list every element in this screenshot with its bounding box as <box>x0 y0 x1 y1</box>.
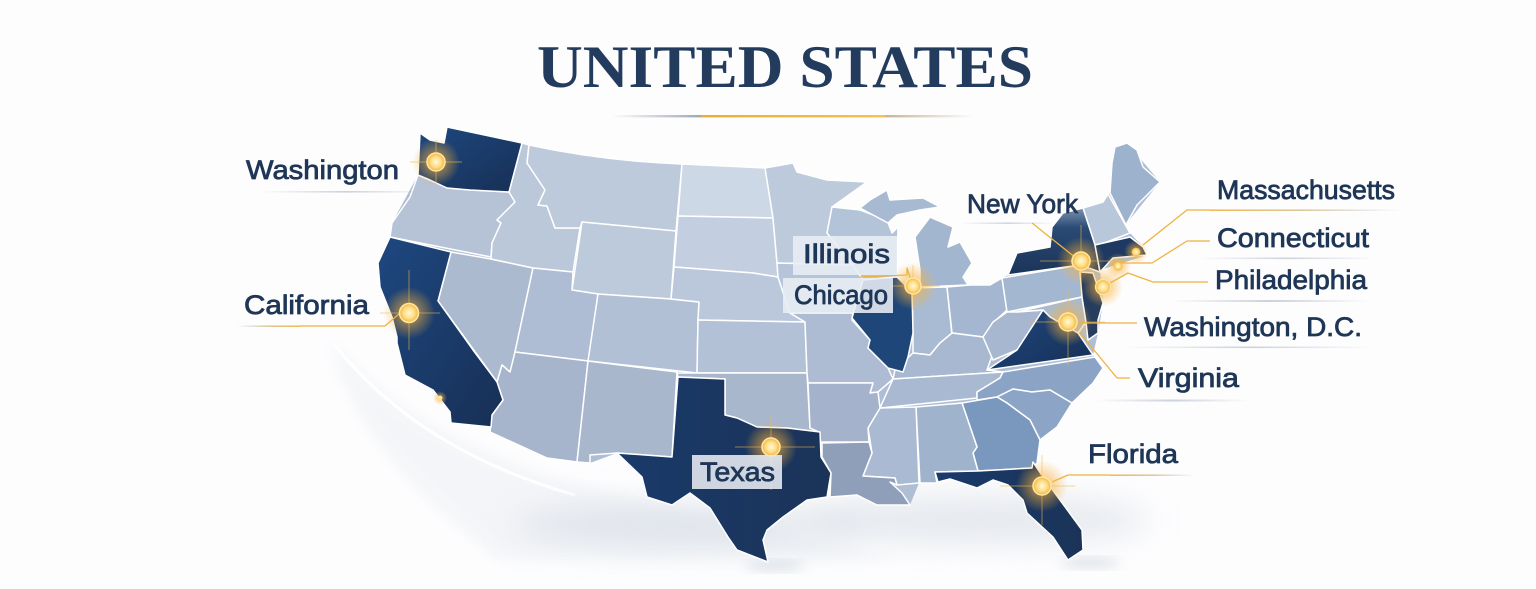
Louisiana <box>822 442 910 505</box>
label: Philadelphia: Philadelphia <box>1215 265 1368 295</box>
Mississippi <box>863 407 919 485</box>
New York state <box>1008 208 1100 275</box>
marker: Massachusetts <box>1124 240 1148 264</box>
label underlines <box>260 191 1375 402</box>
Indiana <box>912 287 952 355</box>
South Carolina <box>997 389 1072 440</box>
label: Washington: Washington <box>246 155 399 185</box>
marker: Texas <box>735 415 815 490</box>
marker: New York <box>1040 225 1125 295</box>
New Mexico <box>577 361 677 463</box>
title underline <box>612 115 974 117</box>
label: Illinois: Illinois <box>803 239 890 269</box>
Nebraska <box>671 267 805 322</box>
Oregon <box>390 175 515 257</box>
marker: small California point <box>433 391 447 405</box>
California state <box>378 237 503 427</box>
Alabama <box>916 403 978 483</box>
Washington state <box>418 127 522 192</box>
Montana <box>527 145 682 231</box>
label: Illinois <box>793 236 897 275</box>
Missouri <box>790 313 893 393</box>
Georgia <box>962 397 1040 471</box>
Pennsylvania <box>1002 265 1082 312</box>
Texas state <box>617 377 831 562</box>
North Carolina <box>977 357 1103 403</box>
label: Connecticut: Connecticut <box>1217 223 1370 253</box>
West Virginia <box>983 310 1043 360</box>
Maryland <box>1017 297 1086 333</box>
marker: Washington D.C. and Virginia <box>1030 290 1105 365</box>
marker: Florida <box>1000 455 1075 525</box>
title: UNITED STATES <box>537 34 1033 100</box>
marker: Philadelphia <box>1083 267 1123 307</box>
Kentucky <box>893 333 1003 379</box>
label: Texas <box>692 455 782 489</box>
Wyoming <box>572 222 676 299</box>
highlighted states <box>378 127 1147 562</box>
Minnesota <box>765 163 867 265</box>
Illinois state <box>852 277 913 372</box>
label: Florida: Florida <box>1088 439 1179 469</box>
Vermont and New Hampshire <box>1083 194 1130 245</box>
label: California: California <box>244 290 370 320</box>
Tennessee <box>880 372 1003 408</box>
Maine <box>1110 143 1160 233</box>
marker: Chicago Illinois <box>889 262 940 310</box>
Colorado <box>588 294 699 373</box>
South Dakota <box>674 216 778 277</box>
Michigan lower peninsula <box>915 217 972 287</box>
Ohio <box>947 278 1007 337</box>
label: Massachusetts: Massachusetts <box>1217 175 1395 205</box>
Utah <box>515 268 598 361</box>
label: Chicago: Chicago <box>794 280 888 310</box>
label: Virginia: Virginia <box>1138 363 1240 393</box>
New Jersey and Delaware area <box>1080 272 1103 340</box>
Oklahoma <box>677 373 820 432</box>
Virginia state <box>987 310 1093 370</box>
Arizona <box>490 352 588 462</box>
Michigan upper peninsula <box>860 190 940 223</box>
marker: Connecticut <box>1105 253 1131 279</box>
leader lines <box>237 210 1400 482</box>
Arkansas <box>808 383 880 442</box>
Kansas <box>697 320 807 373</box>
Idaho <box>491 143 580 272</box>
label: Texas: Texas <box>700 457 775 487</box>
Wisconsin <box>827 207 898 280</box>
label: New York: New York <box>967 189 1078 219</box>
map silhouette backing <box>390 143 1160 505</box>
marker: California <box>380 270 440 350</box>
North Dakota <box>678 164 773 218</box>
map of the United States <box>390 143 1160 505</box>
Nevada <box>438 252 533 382</box>
label: Washington, D.C.: Washington, D.C. <box>1144 312 1362 342</box>
marker: Washington <box>410 138 462 186</box>
Massachusetts and Connecticut <box>1095 237 1147 272</box>
Iowa <box>777 263 863 318</box>
Florida state <box>935 462 1083 560</box>
background swoosh and ground shadow <box>330 340 1150 570</box>
